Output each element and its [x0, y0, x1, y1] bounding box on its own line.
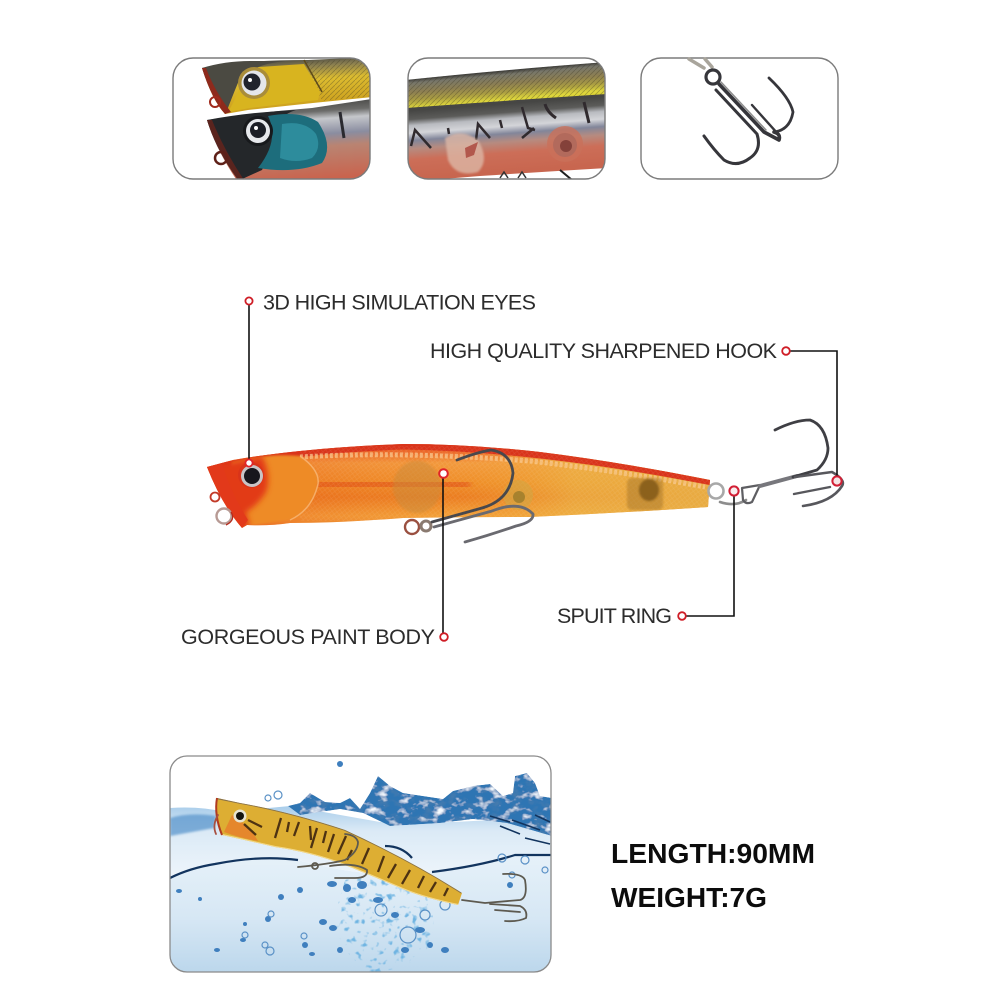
line eye rings: [210, 97, 220, 107]
panel: lure heads close-up: [173, 57, 372, 182]
callout: high quality sharpened hook: HIGH QUALITY SHARPENED HOOK: [430, 339, 778, 363]
small lure hooks: [214, 815, 526, 921]
tail split ring and treble hook: [708, 420, 843, 506]
spec: length: LENGTH:90MM: [611, 838, 815, 869]
bubbles: [176, 881, 513, 956]
small lure: [214, 797, 526, 921]
belly treble hook: [405, 450, 533, 542]
lure body: [207, 444, 710, 528]
callout: 3D high simulation eyes: 3D HIGH SIMULATION EYES: [263, 290, 536, 314]
front line eye rings: [210, 492, 233, 525]
eye: [238, 67, 270, 99]
callout: split ring: SPUIT RING: [557, 604, 672, 628]
icon: treble hook: [689, 59, 793, 164]
panel: treble hook close-up: [641, 58, 838, 179]
panel: lure in water photo: [170, 756, 552, 972]
blue splash: [288, 773, 552, 836]
internal weight shadows: [393, 461, 441, 513]
callout: high quality sharpened hook: [430, 339, 842, 486]
gill plate: [225, 455, 318, 526]
panel: body scale close-up: [406, 58, 607, 182]
main lure: [200, 420, 843, 542]
water below the surface: [170, 855, 551, 972]
callout: gorgeous paint body: [181, 469, 448, 649]
left surface spray: [170, 814, 216, 836]
callout: 3D high simulation eyes: [245, 290, 536, 467]
bubble cluster: [335, 876, 433, 972]
upper gold lure head: [202, 57, 372, 114]
waterline: [170, 846, 551, 878]
surface water layer: [170, 806, 551, 878]
lure eye: [238, 462, 264, 488]
callout: gorgeous paint body: GORGEOUS PAINT BODY: [181, 625, 435, 649]
splash dark streaks: [490, 815, 550, 844]
lower teal lure head: [207, 99, 372, 182]
callout: split ring: [557, 486, 739, 628]
spec: weight: WEIGHT:7G: [611, 882, 767, 913]
